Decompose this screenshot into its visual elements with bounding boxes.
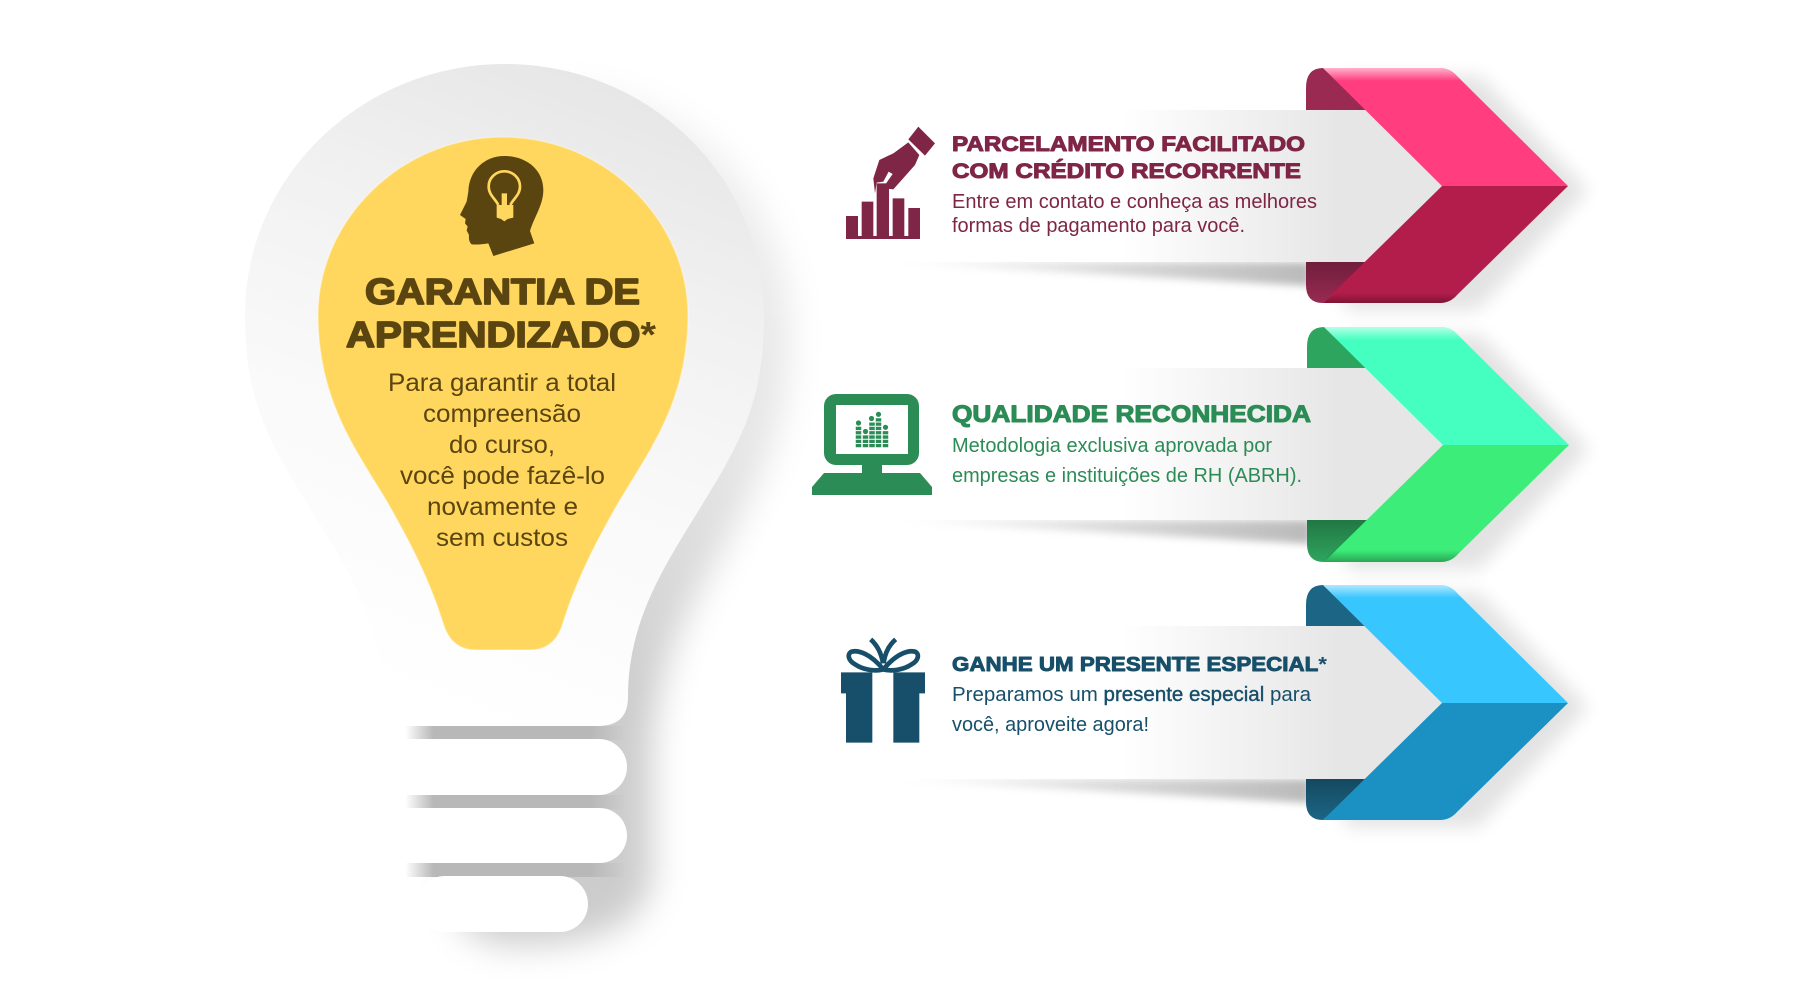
text: bulb description: novamente e — [427, 493, 578, 521]
bulb base ring 3 — [417, 876, 588, 932]
text: bulb description: compreensão — [423, 400, 581, 428]
icon: gift box — [841, 639, 925, 743]
ribbon band — [852, 368, 1443, 520]
chevron upper face — [1323, 68, 1568, 186]
bulb glass — [245, 64, 764, 726]
ribbon fold top — [1306, 585, 1370, 628]
heading: parcelamento facilitado: PARCELAMENTO FACILITADO — [952, 133, 1305, 156]
icon: hand placing bar chart — [846, 127, 935, 239]
yellow bulb core — [318, 137, 688, 650]
light bulb — [245, 64, 790, 945]
heading: parcelamento facilitado: COM CRÉDITO RECORRENTE — [952, 160, 1301, 183]
text: bulb description: sem custos — [436, 524, 568, 552]
arrow panel: presente — [841, 585, 1588, 827]
text: presente description: você, aproveite agora! — [952, 714, 1149, 736]
chevron upper face — [1324, 327, 1569, 445]
text: qualidade description: empresas e instituições de RH (ABRH). — [952, 465, 1302, 487]
arrow panel: qualidade — [812, 327, 1589, 569]
heading: garantia de aprendizado — [346, 271, 656, 355]
text: parcelamento description: Entre em contato e conheça as melhores — [952, 191, 1317, 213]
bulb base ring 1 — [380, 739, 627, 795]
text: qualidade description — [952, 435, 1302, 487]
chevron lower face — [1323, 703, 1568, 820]
text: presente description — [952, 684, 1312, 736]
text: parcelamento description: formas de pagamento para você. — [952, 215, 1245, 237]
heading: garantia de aprendizado: APRENDIZADO * — [346, 314, 656, 355]
heading: garantia de aprendizado: GARANTIA DE — [365, 271, 640, 312]
chevron upper face — [1323, 585, 1568, 703]
text: bulb description: do curso, — [449, 431, 555, 459]
heading: qualidade reconhecida: QUALIDADE RECONHECIDA — [952, 401, 1311, 428]
ribbon fold top — [1306, 68, 1370, 112]
arrow panel: parcelamento — [846, 68, 1588, 310]
ribbon fold bottom — [1307, 518, 1371, 562]
text: presente description: Preparamos um presente especial para — [952, 684, 1312, 706]
text: parcelamento description — [952, 191, 1317, 237]
ribbon band — [852, 626, 1442, 779]
icon: computer monitor — [812, 394, 932, 495]
ribbon fold top — [1307, 327, 1371, 370]
text: bulb description — [388, 369, 616, 552]
icon: head with light bulb — [460, 156, 543, 256]
heading: ganhe um presente especial: GANHE UM PRESENTE ESPECIAL * — [952, 654, 1327, 676]
text: bulb description: você pode fazê-lo — [400, 462, 605, 490]
text: bulb description: Para garantir a total — [388, 369, 616, 397]
ribbon fold bottom — [1306, 777, 1370, 820]
text: qualidade description: Metodologia exclusiva aprovada por — [952, 435, 1272, 457]
chevron lower face — [1324, 445, 1569, 562]
ribbon fold bottom — [1306, 260, 1370, 303]
heading: parcelamento facilitado — [952, 133, 1305, 183]
chevron lower face — [1323, 186, 1568, 303]
ribbon band — [852, 110, 1442, 262]
bulb socket gaps — [405, 726, 625, 877]
bulb base ring 2 — [380, 808, 627, 863]
